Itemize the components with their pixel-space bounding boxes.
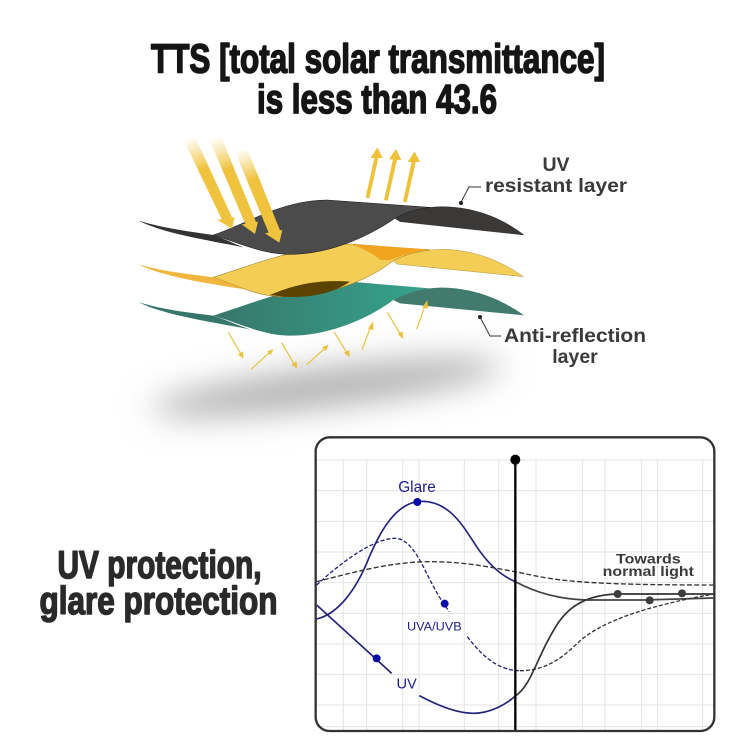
label: Anti-reflection layer: Anti-reflection [504, 325, 646, 347]
floor shadow [149, 347, 504, 428]
label: UV resistant layer: UV [542, 154, 570, 176]
black UV resistant layer [138, 200, 524, 254]
title: TTS [total solar transmittance] [151, 36, 605, 82]
label: Anti-reflection layer [478, 315, 646, 368]
curve: UVA/UVB [317, 538, 520, 671]
subheading: glare protection [40, 580, 278, 623]
label: Anti-reflection layer: layer [552, 346, 598, 368]
label: UV resistant layer [459, 154, 627, 205]
chart labels: UVA/UVB [407, 619, 462, 633]
chart labels: UV [396, 677, 417, 693]
yellow layer [138, 244, 523, 297]
label: UV resistant layer: resistant layer [485, 175, 627, 197]
arrows: small scattered light [228, 300, 428, 369]
subheading [40, 544, 278, 623]
chart labels: normal light [603, 564, 695, 579]
leader line [461, 187, 481, 202]
curve: glare [317, 501, 515, 619]
title: is less than 43.6 [257, 76, 497, 122]
panel: line chart [316, 437, 714, 731]
arrows: incoming sunlight [183, 137, 282, 243]
data points [373, 498, 449, 662]
chart labels: Glare [398, 479, 436, 496]
card background [316, 437, 714, 731]
chart labels [396, 479, 695, 693]
curve: long dashed [317, 562, 713, 585]
layered film diagram [138, 137, 524, 428]
subheading: UV protection, [58, 544, 262, 587]
leader line [480, 317, 501, 336]
title [151, 36, 605, 122]
curve: UV [317, 605, 515, 713]
axis [512, 460, 519, 731]
teal anti-reflection layer [138, 282, 524, 336]
arrows: reflected light [366, 147, 420, 202]
card border [316, 437, 714, 731]
chart labels: Towards [616, 551, 681, 566]
